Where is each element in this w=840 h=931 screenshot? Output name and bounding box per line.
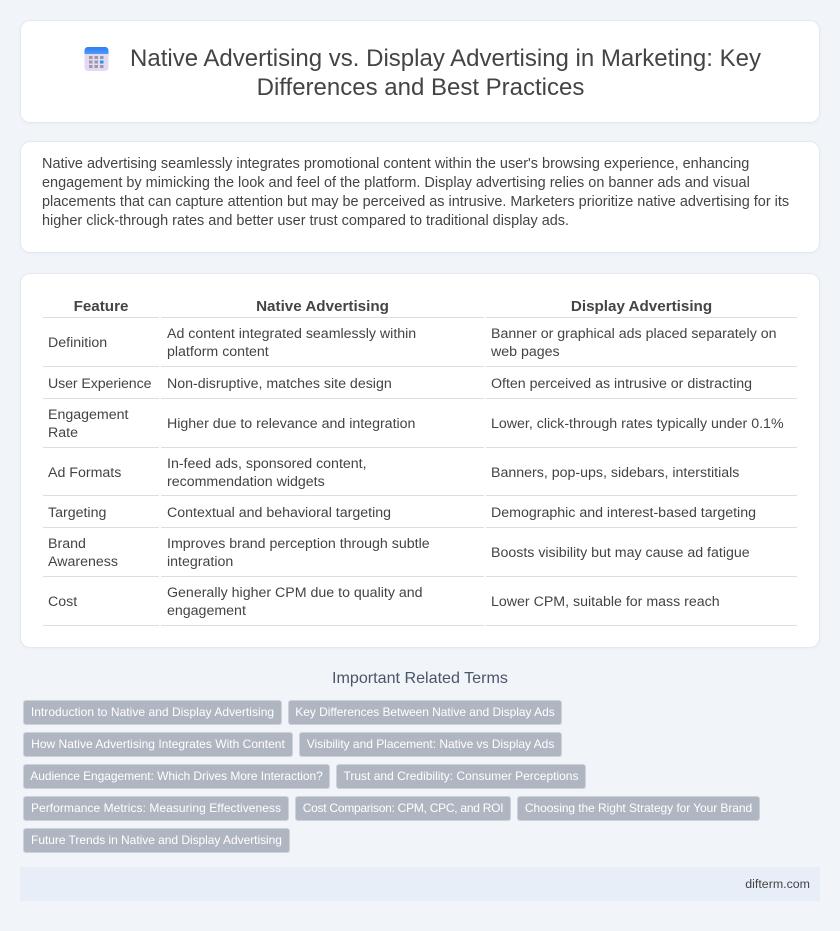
comparison table: Definition <box>48 335 107 351</box>
comparison table: Higher due to relevance and integration <box>167 416 415 432</box>
comparison table: Boosts visibility but may cause ad fatigue <box>491 545 750 561</box>
tag: Audience Engagement: Which Drives More Interaction? <box>30 769 323 783</box>
comparison table <box>43 298 797 626</box>
related terms tags <box>23 700 760 853</box>
comparison table: engagement <box>167 603 246 619</box>
related terms heading: Important Related Terms <box>332 669 508 687</box>
intro paragraph <box>42 156 789 229</box>
comparison table: Contextual and behavioral targeting <box>167 504 391 520</box>
comparison table: Banner or graphical ads placed separately on <box>491 326 777 342</box>
comparison table: Lower, click-through rates typically under 0.1% <box>491 416 784 432</box>
comparison table: Generally higher CPM due to quality and <box>167 585 423 601</box>
tag: Future Trends in Native and Display Advertising <box>31 833 282 847</box>
tag <box>23 828 290 853</box>
intro paragraph: engagement by mimicking the look and feel of the platform. Display advertising relies on banner ads and visual <box>42 175 750 191</box>
comparison table: Ad Formats <box>48 464 121 480</box>
comparison table: Demographic and interest-based targeting <box>491 504 756 520</box>
tag: How Native Advertising Integrates With Content <box>31 737 285 751</box>
comparison table: Non-disruptive, matches site design <box>167 376 392 392</box>
tag <box>299 732 562 757</box>
tag: Introduction to Native and Display Advertising <box>31 705 274 719</box>
tag <box>288 700 562 725</box>
tag: Choosing the Right Strategy for Your Brand <box>525 801 752 815</box>
tag: Performance Metrics: Measuring Effectiveness <box>31 801 281 815</box>
intro paragraph: Native advertising seamlessly integrates promotional content within the user's browsing experience, enhancing <box>42 156 749 172</box>
comparison table: Often perceived as intrusive or distracting <box>491 376 752 392</box>
comparison table: Display Advertising <box>571 298 712 315</box>
intro paragraph: placements that can capture attention but may be perceived as intrusive. Marketers prioritize native advertising for its <box>42 194 789 210</box>
footer bar <box>20 867 820 901</box>
tag: Key Differences Between Native and Display Ads <box>295 705 555 719</box>
title: Differences and Best Practices <box>257 74 584 101</box>
comparison table: Targeting <box>48 504 106 520</box>
comparison table: recommendation widgets <box>167 474 325 490</box>
comparison table: Cost <box>48 594 77 610</box>
tag <box>295 796 511 821</box>
tag <box>23 732 293 757</box>
tag: Cost Comparison: CPM, CPC, and ROI <box>303 801 503 815</box>
comparison table: Awareness <box>48 554 118 570</box>
footer source: difterm.com <box>745 877 810 891</box>
icon: calendar <box>84 47 108 71</box>
comparison table: In-feed ads, sponsored content, <box>167 456 367 472</box>
tag <box>517 796 760 821</box>
tag: Trust and Credibility: Consumer Perceptions <box>344 769 578 783</box>
comparison table: Brand <box>48 536 86 552</box>
comparison table: platform content <box>167 344 269 360</box>
comparison table: Improves brand perception through subtle <box>167 536 430 552</box>
title <box>130 45 761 101</box>
comparison table: Rate <box>48 425 78 441</box>
header card <box>20 20 820 123</box>
title: Native Advertising vs. Display Advertising in Marketing: Key <box>130 45 761 72</box>
tag <box>336 764 586 789</box>
tag <box>23 796 289 821</box>
comparison table: web pages <box>491 344 560 360</box>
comparison table: User Experience <box>48 376 151 392</box>
comparison table: Ad content integrated seamlessly within <box>167 326 416 342</box>
comparison table: Engagement <box>48 407 128 423</box>
intro text panel <box>20 141 820 253</box>
intro paragraph: higher click-through rates and better user trust compared to traditional display ads. <box>42 213 569 229</box>
comparison table: Lower CPM, suitable for mass reach <box>491 594 720 610</box>
comparison table: Feature <box>74 298 128 315</box>
tag <box>23 700 282 725</box>
tag <box>23 764 330 789</box>
comparison table: Native Advertising <box>256 298 389 315</box>
comparison table: Banners, pop-ups, sidebars, interstitials <box>491 464 739 480</box>
comparison table: integration <box>167 554 233 570</box>
tag: Visibility and Placement: Native vs Display Ads <box>307 737 554 751</box>
panel: comparison table <box>20 273 820 648</box>
